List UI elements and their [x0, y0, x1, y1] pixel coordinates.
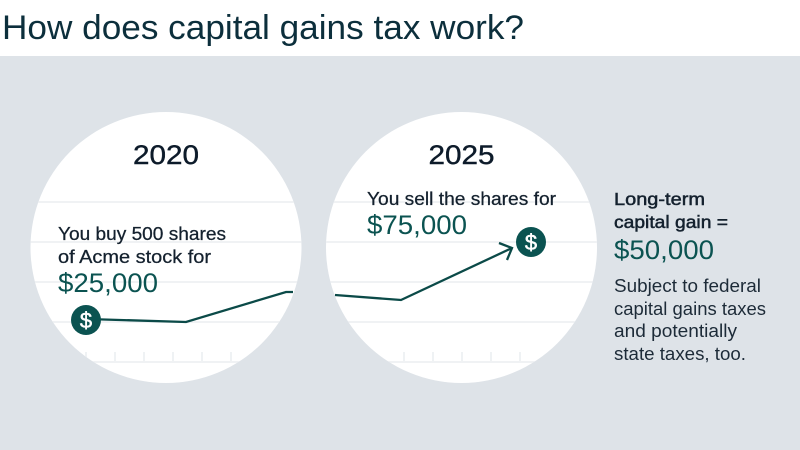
icon: dollar coin 2025 [516, 227, 546, 257]
icon: dollar coin 2025: $ [525, 230, 537, 255]
callout body text: Subject to federal [614, 276, 761, 296]
line chart: 2020 [87, 292, 293, 322]
callout body text: state taxes, too. [614, 344, 746, 364]
callout body text: capital gains taxes [614, 299, 766, 319]
panel: 2025 circle [326, 112, 598, 383]
panel: 2020 circle [30, 112, 302, 383]
value: $25,000: $25,000 [58, 268, 158, 298]
icon: dollar coin 2020 [71, 305, 101, 335]
line chart: 2025 with arrow [335, 243, 512, 300]
callout heading: capital gain = [614, 212, 728, 232]
callout heading: Long-term [614, 189, 705, 209]
callout body text: and potentially [614, 321, 737, 341]
heading: 2020: 2020 [133, 140, 199, 170]
value: $50,000: $50,000 [614, 235, 714, 265]
heading: 2025: 2025 [428, 140, 494, 170]
text: purchase description: You buy 500 shares [58, 224, 226, 244]
callout: long-term capital gain [614, 189, 766, 364]
value: $75,000: $75,000 [367, 210, 467, 240]
text: sale description: You sell the shares for [367, 189, 556, 209]
text: purchase description: of Acme stock for [58, 247, 211, 267]
title: How does capital gains tax work? [2, 9, 524, 47]
icon: dollar coin 2020: $ [80, 308, 92, 333]
